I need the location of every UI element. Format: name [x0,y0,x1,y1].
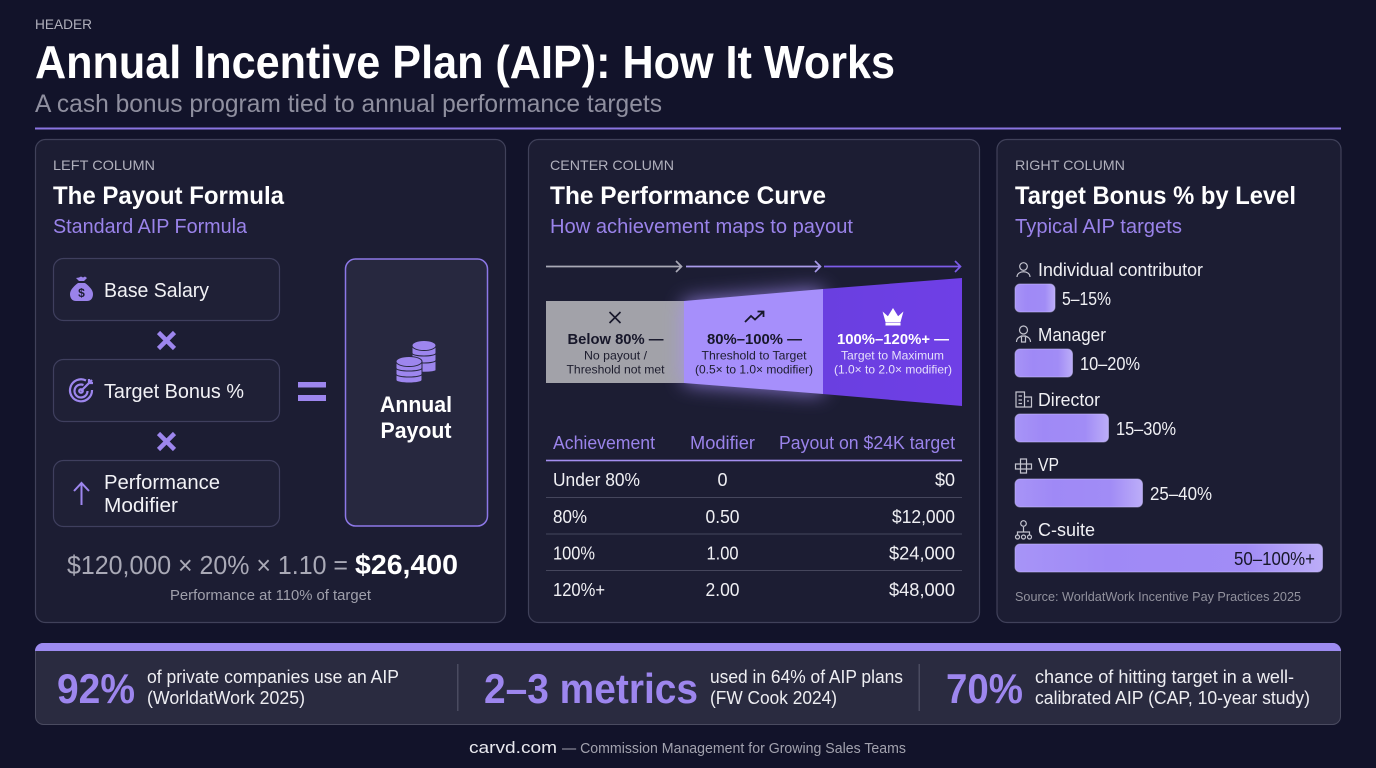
bar: VP [1015,455,1212,507]
bar: VP: 25–40% [1150,484,1212,504]
segment: below 80%: Threshold not met [566,362,665,376]
bar: individual contributor [1015,260,1203,312]
center subheading: How achievement maps to payout [550,216,853,238]
row: 120%+: $48,000 [889,580,955,600]
icon: person [1017,263,1030,277]
row: 120%+ [553,580,955,600]
icon: network cubes [1016,459,1032,473]
formula box: base salary: Base Salary [104,279,210,302]
title: Annual Incentive Plan (AIP): How It Works [35,36,895,88]
left eyebrow: LEFT COLUMN [53,157,155,173]
footer: — Commission Management for Growing Sales Teams [562,741,906,757]
center eyebrow: CENTER COLUMN [550,157,674,173]
stat: 92% [57,665,399,712]
multiply sign [158,434,174,450]
stat: 2–3 metrics: (FW Cook 2024) [710,688,837,708]
segment: 100% to 120%+: (1.0× to 2.0× modifier) [834,362,952,376]
bar: manager: 10–20% [1080,354,1140,374]
segment: 100% to 120%+: Target to Maximum [841,348,944,362]
source note: Source: WorldatWork Incentive Pay Practices 2025 [1015,589,1301,604]
stat: 70%: calibrated AIP (CAP, 10-year study) [1035,688,1310,708]
table header: Payout on $24K target [779,433,955,453]
icon: up arrow [74,483,89,505]
icon: manager [1016,326,1030,342]
formula box: target bonus [54,360,280,422]
right eyebrow: RIGHT COLUMN [1015,157,1125,173]
bar: director [1015,390,1176,442]
segment: 100% to 120%+ [823,278,962,406]
row: 100% [553,544,955,564]
segment: 80% to 100% [684,289,823,394]
bar: C-suite: 50–100%+ [1234,549,1315,569]
row: 120%+: 120%+ [553,580,605,600]
segment: 80% to 100%: 80%–100% — [707,331,802,348]
result box: annual payout: Payout [380,418,452,443]
result box: annual payout: Annual [380,392,452,417]
segment: 100% to 120%+: 100%–120%+ — [837,331,949,348]
equals sign [298,382,326,401]
stat: 70%: 70% [946,665,1023,712]
multiply sign [158,332,174,348]
header eyebrow label: HEADER [35,16,92,32]
result box: annual payout [346,259,488,526]
formula box: performance modifier: Performance [104,471,220,494]
row: 80%: $12,000 [892,507,955,527]
stat: 70% [946,665,1310,712]
bar: director: Director [1038,390,1100,410]
formula box: target bonus: Target Bonus % [104,380,244,403]
icon: money bag [70,276,93,301]
header [35,16,895,118]
row: 100%: 1.00 [706,544,738,564]
stat: 70%: chance of hitting target in a well- [1035,667,1294,687]
stat: 92%: (WorldatWork 2025) [147,688,305,708]
formula box: performance modifier: Modifier [104,494,178,517]
row: 100%: $24,000 [889,544,955,564]
row: 100%: 100% [553,544,595,564]
center heading: The Performance Curve [550,182,826,210]
formula box: base salary [54,258,280,320]
right heading: Target Bonus % by Level [1015,182,1296,210]
left subheading: Standard AIP Formula [53,216,248,238]
panel: target bonus by level [997,140,1341,622]
bar: individual contributor: Individual contributor [1038,260,1203,280]
segment: below 80%: Below 80% — [568,331,664,348]
icon: coin stacks [396,340,436,383]
payout table [546,433,962,600]
row: under 80%: Under 80% [553,470,640,490]
right subheading: Typical AIP targets [1015,216,1182,238]
stat: 92%: of private companies use an AIP [147,667,399,687]
arrows: performance direction [546,261,960,272]
row: under 80%: $0 [935,470,955,490]
table header: Achievement [553,433,655,453]
segment: below 80% [546,289,823,394]
row: under 80% [553,470,955,490]
panel: payout formula [36,140,506,622]
left heading: The Payout Formula [53,182,285,210]
bar: manager [1015,325,1140,377]
row: 80%: 0.50 [706,507,740,527]
stats strip [35,643,1341,724]
panel: performance curve [528,140,980,622]
table header: Modifier [690,433,755,453]
icon: org chart [1016,521,1032,539]
bar: C-suite [1015,520,1322,572]
row: 80%: 80% [553,507,587,527]
funnel chart [546,278,962,406]
formula box: performance modifier [54,460,280,526]
bar: director: 15–30% [1116,419,1176,439]
icon: building [1016,392,1032,407]
bar: manager: Manager [1038,325,1106,345]
worked example [67,549,458,604]
icon: target [70,379,93,401]
subtitle: A cash bonus program tied to annual performance targets [35,90,662,118]
icon: money bag: $ [78,286,85,300]
bar: individual contributor: 5–15% [1062,289,1111,309]
bar: C-suite: C-suite [1038,520,1095,540]
bar: VP: VP [1038,455,1059,475]
stat: 2–3 metrics [484,665,903,712]
table header [546,433,962,461]
segment: 80% to 100%: (0.5× to 1.0× modifier) [695,362,813,376]
row: under 80%: 0 [717,470,728,490]
worked example: $26,400 [355,549,458,580]
stat: 2–3 metrics: used in 64% of AIP plans [710,667,903,687]
row: 120%+: 2.00 [706,580,740,600]
segment: below 80%: No payout / [584,348,648,362]
segment: 80% to 100%: Threshold to Target [702,348,807,362]
footer: carvd.com [469,739,557,757]
icon: crown [884,309,902,325]
worked example: $120,000 × 20% × 1.10 = [67,550,348,580]
footer [469,739,906,757]
worked example: Performance at 110% of target [170,588,371,604]
stat: 92%: 92% [57,665,135,712]
stat: 2–3 metrics: 2–3 metrics [484,665,698,712]
row: 80% [553,507,955,527]
